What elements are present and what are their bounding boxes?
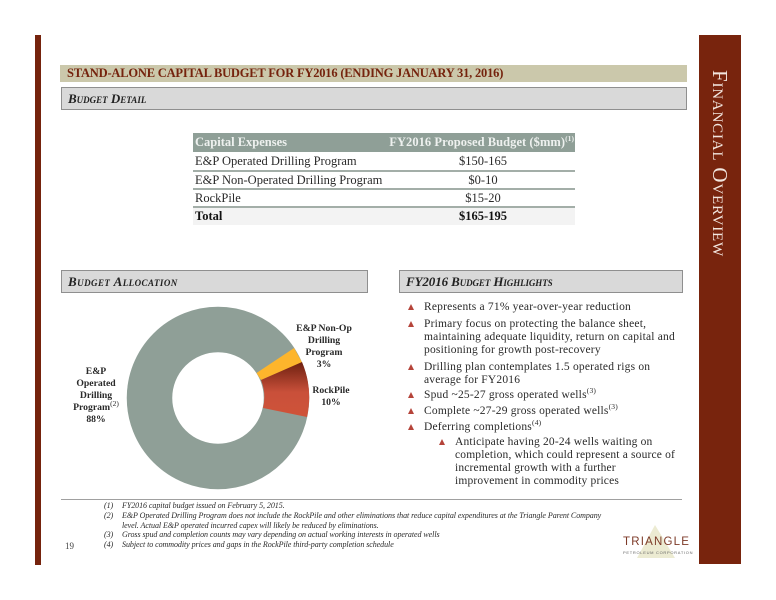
side panel: Financial Overview bbox=[699, 35, 741, 564]
bullet: Represents a 71% year-over-year reduction bbox=[424, 301, 631, 313]
bullet bbox=[424, 361, 650, 387]
table header: FY2016 Proposed Budget ($mm)(1) bbox=[389, 134, 574, 149]
bullet: average for FY2016 bbox=[424, 374, 520, 386]
page number: 19 bbox=[65, 541, 74, 551]
label: RockPile: RockPile bbox=[312, 385, 350, 396]
table header bbox=[193, 133, 575, 152]
bullet: Drilling plan contemplates 1.5 operated rigs on bbox=[424, 361, 650, 373]
bullet bbox=[424, 318, 675, 357]
donut chart bbox=[126, 306, 310, 490]
logo: Triangle Petroleum bbox=[623, 525, 693, 558]
bullet: maintaining adequate liquidity, return on capital and bbox=[424, 331, 675, 343]
label: operated: 88% bbox=[86, 414, 106, 425]
donut segment: RockPile bbox=[261, 362, 309, 417]
table row: non-operated bbox=[193, 172, 575, 190]
table row: RockPile bbox=[193, 190, 575, 208]
logo triangle bbox=[637, 525, 675, 558]
table row: non-operated: $0-10 bbox=[468, 173, 498, 187]
label: non-op: Drilling bbox=[308, 335, 340, 346]
footnote 2 bbox=[104, 511, 602, 530]
heading: budget highlights bbox=[399, 270, 683, 293]
table row: operated: E&P Operated Drilling Program bbox=[195, 154, 357, 168]
footnote 3: Gross spud and completion counts may vary depending on actual working interests in operated wells bbox=[122, 530, 440, 539]
logo tagline: PETROLEUM CORPORATION bbox=[623, 550, 693, 555]
label: non-op: Program bbox=[306, 347, 342, 358]
sub-bullet: improvement in commodity prices bbox=[455, 475, 619, 487]
bullet: Primary focus on protecting the balance sheet, bbox=[424, 318, 646, 330]
title bar bbox=[60, 65, 687, 82]
table row: total: Total bbox=[195, 209, 222, 223]
donut segment: operated bbox=[150, 330, 286, 466]
label: non-op bbox=[296, 323, 352, 370]
heading: budget allocation: Budget Allocation bbox=[68, 274, 178, 289]
table row: operated bbox=[193, 152, 575, 172]
label: operated: Drilling bbox=[80, 390, 112, 401]
table row: non-operated: E&P Non-Operated Drilling Program bbox=[195, 173, 382, 187]
footnote 1: (1) bbox=[104, 501, 113, 510]
side panel title: Financial Overview bbox=[708, 70, 732, 257]
label: RockPile bbox=[312, 385, 350, 408]
label: non-op: 3% bbox=[317, 359, 331, 370]
footnote divider bbox=[61, 499, 682, 500]
sub-bullet: completion, which could represent a source of bbox=[455, 449, 675, 461]
sub-bullet bbox=[455, 436, 675, 488]
table row: total: $165-195 bbox=[459, 209, 507, 223]
bullet: Spud ~25-27 gross operated wells(3) bbox=[424, 386, 596, 401]
footnote 2: level. Actual E&P operated incurred capex will likely be reduced by eliminations. bbox=[122, 521, 379, 530]
label: operated: Program(2) bbox=[73, 399, 119, 413]
bullet: positioning for growth post-recovery bbox=[424, 344, 601, 356]
footnote 3: (3) bbox=[104, 530, 113, 539]
bullet: Complete ~27-29 gross operated wells(3) bbox=[424, 402, 618, 417]
label: operated: E&P bbox=[86, 366, 106, 377]
sub-bullet: incremental growth with a further bbox=[455, 462, 616, 474]
footnote 2: (2) bbox=[104, 511, 113, 520]
donut segment: non-op bbox=[256, 348, 302, 380]
heading: budget detail: Budget Detail bbox=[68, 91, 146, 106]
footnote 4: (4) bbox=[104, 540, 113, 549]
label: RockPile: 10% bbox=[321, 397, 341, 408]
table row: RockPile: $15-20 bbox=[465, 191, 501, 205]
footnote 2: E&P Operated Drilling Program does not include the RockPile and other eliminations that reduce capital expenditures at the Triangle Parent Company bbox=[122, 511, 601, 520]
heading: budget allocation bbox=[61, 270, 368, 293]
heading: budget highlights: FY2016 Budget Highlights bbox=[406, 274, 552, 289]
table header: Capital Expenses bbox=[195, 135, 287, 149]
logo wordmark: TRIANGLE bbox=[623, 536, 690, 548]
table: capital expenses bbox=[193, 133, 575, 225]
heading: budget detail bbox=[61, 87, 687, 110]
left accent bar bbox=[35, 35, 41, 565]
label: non-op: E&P Non-Op bbox=[296, 323, 352, 334]
footnote 4: Subject to commodity prices and gaps in the RockPile third-party completion schedule bbox=[122, 540, 394, 549]
label: operated: Operated bbox=[76, 378, 116, 389]
table row: RockPile: RockPile bbox=[195, 191, 241, 205]
bullet: Deferring completions(4) bbox=[424, 418, 541, 433]
label: operated bbox=[73, 366, 119, 425]
table row: operated: $150-165 bbox=[459, 154, 507, 168]
footnote 1: FY2016 capital budget issued on February 5, 2015. bbox=[122, 501, 285, 510]
title bar: STAND-ALONE CAPITAL BUDGET FOR FY2016 (ENDING JANUARY 31, 2016) bbox=[67, 66, 503, 80]
table row: total bbox=[193, 208, 575, 225]
sub-bullet: Anticipate having 20-24 wells waiting on bbox=[455, 436, 652, 448]
